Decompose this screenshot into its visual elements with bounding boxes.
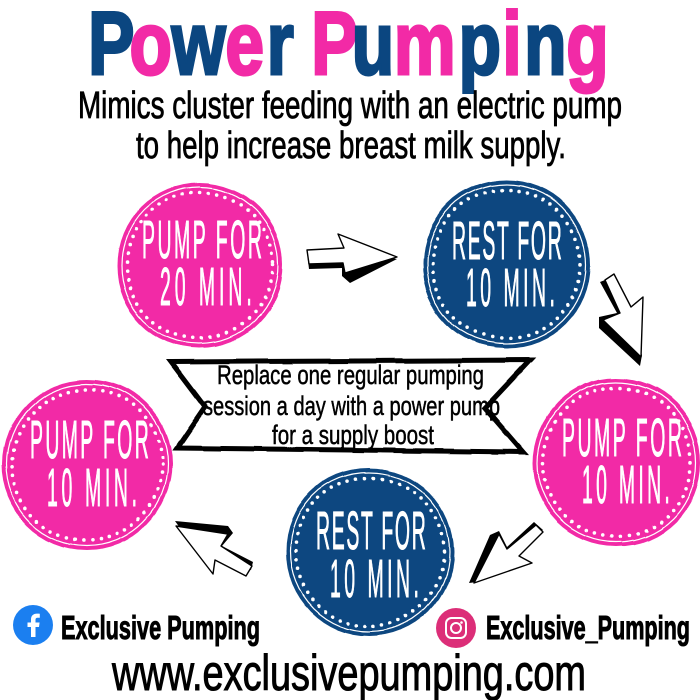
arrow: right [307,234,397,283]
banner: for a supply boost [272,420,434,450]
step: pump for 10 min (left) [2,379,172,549]
facebook handle: Exclusive Pumping [61,609,260,646]
arrow: up left [175,521,253,576]
step: rest for 10 min (bottom): 10 MIN. [330,548,419,609]
banner: Replace one regular pumping [217,360,484,390]
step: rest for 10 min (bottom) [286,468,454,636]
subtitle [78,85,622,167]
arrow: down right [599,274,643,366]
arrow: down left [469,522,543,583]
step: pump for 10 min (left): 10 MIN. [47,457,137,518]
step: pump for 20 min [117,182,283,348]
icon: instagram [436,608,476,648]
banner: session a day with a power pump [203,391,500,421]
step: pump for 10 min (right) [533,378,700,546]
step: pump for 10 min (right): PUMP FOR [562,407,682,468]
step: rest for 10 min [422,180,590,348]
banner [171,360,530,452]
icon: facebook [13,605,53,645]
step: rest for 10 min: REST FOR [452,210,562,271]
step: rest for 10 min (bottom): REST FOR [316,500,426,561]
step: pump for 10 min (right): 10 MIN. [582,454,670,515]
step: pump for 10 min (left): PUMP FOR [30,409,149,470]
step: pump for 20 min: 20 MIN. [160,256,252,317]
step: rest for 10 min: 10 MIN. [466,257,555,318]
step: pump for 20 min: PUMP FOR [142,209,262,270]
